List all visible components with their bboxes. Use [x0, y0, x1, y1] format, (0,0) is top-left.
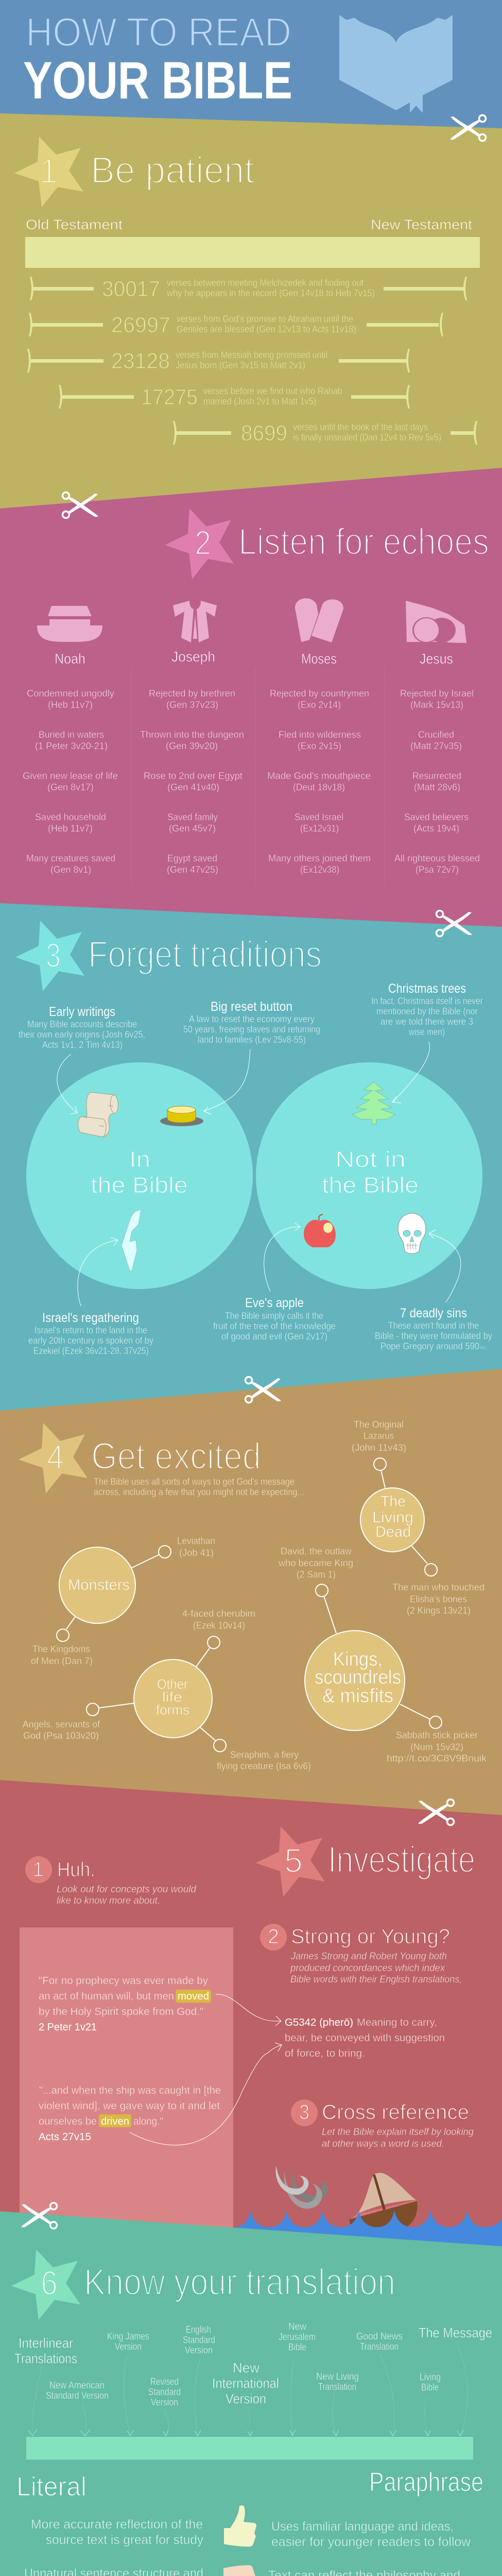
text: paraphrase pro — [271, 2519, 471, 2549]
translation labels: Standard Version — [46, 2391, 109, 2401]
bubble: kings, scoundrels and misfits: & misfits — [322, 1685, 393, 1707]
step 2: strong or young — [260, 1924, 462, 1985]
quote: acts: along." — [133, 2116, 163, 2127]
step 2: strong or young: produced concordances which index — [290, 1963, 445, 1974]
span: 26997 verses: Gentiles are blessed (Gen 12v13 to Acts 11v18) — [177, 324, 356, 334]
text: israel's regathering: early 20th century is spoken of by — [28, 1335, 153, 1346]
step 1: huh: like to know more about. — [57, 1895, 160, 1906]
text: literal pro — [31, 2517, 203, 2547]
column: Joseph: (Gen 37v23) — [166, 700, 218, 710]
arrow: christmas text to tree — [392, 1042, 430, 1103]
column: Moses: (Exo 2v15) — [298, 741, 341, 751]
icon: open book — [339, 15, 453, 113]
column: Joseph: (Gen 41v40) — [167, 782, 219, 792]
star number 6: 6 — [41, 2264, 58, 2302]
span: 30017 verses: verses between meeting Melchizedek and finding out — [167, 278, 363, 288]
label: literal: Literal — [16, 2472, 86, 2502]
span: 8699 verses — [173, 421, 477, 446]
bible bar — [25, 237, 480, 268]
span: 23128 verses: Jesus born (Gen 3v15 to Matt 2v1) — [176, 360, 305, 370]
column: Moses: Many others joined them — [268, 853, 371, 863]
translation labels: Version — [151, 2397, 178, 2408]
label: david — [278, 1546, 353, 1580]
span: 30017 verses: why he appears in the record (Gen 14v18 to Heb 7v15) — [166, 288, 375, 298]
column names: Jesus — [420, 651, 453, 667]
intro text: The Bible uses all sorts of ways to get God's message — [94, 1477, 295, 1487]
column: Moses: Saved Israel — [295, 812, 343, 822]
label: elisha's bones: Elisha's bones — [410, 1594, 467, 1604]
column: Jesus: (Psa 72v7) — [416, 865, 459, 875]
step 1: huh: Huh. — [57, 1858, 95, 1881]
quote: 2 peter: an act of human will, but men — [39, 1991, 174, 2002]
testament labels: Old Testament — [26, 217, 123, 232]
translation labels: Translations — [14, 2351, 77, 2366]
column: Noah: Given new lease of life — [23, 771, 118, 781]
span: 17275 verses: married (Josh 2v1 to Matt 1v5) — [203, 396, 316, 406]
column names — [55, 649, 453, 667]
arrow: driven to definition — [130, 2043, 282, 2145]
bubble: other life forms: life — [162, 1689, 182, 1705]
label: seraphim — [217, 1750, 311, 1771]
scissors divider — [437, 911, 472, 937]
text: israel's regathering: Israel's return to the land in the — [34, 1325, 147, 1335]
text: early writings — [19, 1005, 145, 1050]
translation labels: Translation — [360, 2342, 399, 2352]
label: the kingdoms of men: of Men (Dan 7) — [31, 1656, 93, 1666]
bubble: other life forms: forms — [156, 1702, 189, 1718]
text: 7 deadly sins: 7 deadly sins — [400, 1306, 467, 1320]
quote: acts: ourselves be — [39, 2116, 97, 2127]
icon: ark — [37, 606, 102, 642]
bubble: kings, scoundrels and misfits — [305, 1584, 442, 1731]
label: leviathan — [177, 1536, 215, 1558]
column: Noah: (Heb 11v7) — [48, 823, 93, 834]
step 3: cross reference: Cross reference — [322, 2101, 469, 2124]
column: Joseph: (Gen 39v20) — [166, 741, 218, 751]
text: christmas trees: Christmas trees — [388, 981, 466, 996]
star number 3: 3 — [46, 936, 61, 974]
column: Moses: (Exo 2v14) — [298, 700, 341, 710]
text: christmas trees: In fact, Christmas itself is never — [371, 996, 483, 1006]
translation labels: New Living — [316, 2371, 359, 2382]
span: 17275 verses — [59, 385, 410, 410]
intro text — [94, 1477, 304, 1497]
translation labels: English — [186, 2325, 211, 2335]
text: christmas trees: wise men) — [408, 1027, 445, 1037]
column: Joseph: Rose to 2nd over Egypt — [144, 771, 243, 781]
span: 23128 verses: verses from Messiah being promised until — [176, 350, 327, 360]
panel: 1 be patient — [0, 113, 502, 510]
translation labels: Translation — [318, 2382, 356, 2393]
step 1: huh: Look out for concepts you would — [57, 1884, 197, 1895]
star number 1: 1 — [39, 152, 58, 190]
label: cherubim: 4-faced cherubim — [182, 1608, 255, 1619]
arrow: early writings to scroll — [57, 1054, 77, 1114]
text: eve's apple — [213, 1296, 336, 1342]
label: elisha's bones: (2 Kings 13v21) — [407, 1605, 471, 1616]
text: eve's apple: fruit of the tree of the knowledge — [213, 1321, 336, 1331]
text: early writings: Many Bible accounts describe — [27, 1019, 137, 1029]
step 1: huh — [25, 1856, 197, 1906]
text: 7 deadly sins: Bible - they were formulated by — [375, 1331, 492, 1341]
panel: header — [0, 0, 502, 131]
quote: 2 peter — [39, 1975, 211, 2033]
column: Jesus — [394, 688, 480, 875]
column: Joseph: Rejected by brethren — [149, 688, 235, 699]
label: the original lazarus: (John 11v43) — [352, 1443, 406, 1453]
scissors divider — [245, 1377, 281, 1402]
column: Joseph: (Gen 45v7) — [169, 823, 216, 834]
translation labels: International — [212, 2376, 279, 2391]
label: cherubim: (Ezek 10v14) — [193, 1620, 245, 1631]
column: Noah — [23, 688, 118, 875]
icon: coat — [173, 601, 217, 642]
column: Jesus: All righteous blessed — [394, 853, 480, 863]
text: paraphrase pro: easier for younger readers to follow — [271, 2535, 471, 2549]
column: Moses: (Deut 18v18) — [293, 782, 345, 792]
translation labels: The Message — [419, 2325, 492, 2341]
label: angels — [23, 1719, 100, 1741]
translation labels: King James — [107, 2331, 149, 2342]
bubble: the living dead: Dead — [375, 1523, 411, 1540]
translation labels: Bible — [421, 2382, 439, 2393]
text: christmas trees — [371, 981, 483, 1037]
panel: 5 investigate — [0, 1780, 502, 2251]
label: sabbath stick picker: Sabbath stick picker — [396, 1730, 478, 1740]
scissors divider — [22, 2203, 57, 2229]
icon: reset button — [160, 1106, 203, 1126]
label: cherubim — [182, 1608, 255, 1631]
translation labels: Bible — [288, 2342, 306, 2353]
icon: apple — [304, 1214, 336, 1247]
translation labels: Version — [185, 2345, 213, 2356]
label: sabbath stick picker: http://t.co/3C8V9Bnuik — [387, 1753, 487, 1764]
step 2: strong or young: Strong or Young? — [291, 1925, 450, 1948]
scissors divider — [419, 1799, 454, 1825]
text: early writings: their own early origins (Josh 6v25, — [19, 1029, 145, 1040]
span: 30017 verses: 30017 — [102, 277, 160, 301]
text: big reset button: 50 years, freeing slaves and returning — [183, 1024, 320, 1035]
text: eve's apple: Eve's apple — [245, 1296, 304, 1310]
bubble: the living dead: The — [380, 1493, 406, 1510]
text: eve's apple: of good and evil (Gen 2v17) — [221, 1331, 327, 1342]
text: literal pro: source text is great for study — [46, 2533, 203, 2547]
star number 2: 2 — [195, 523, 211, 562]
scissors divider — [63, 493, 98, 518]
translation labels: Standard — [148, 2387, 181, 2398]
title: YOUR BIBLE — [23, 51, 292, 110]
circle: not in the bible — [256, 1062, 482, 1289]
label: elisha's bones — [392, 1582, 484, 1616]
definition: g5342 — [285, 2017, 445, 2059]
column: Noah: Saved household — [35, 812, 106, 822]
label: the original lazarus: Lazarus — [363, 1431, 394, 1441]
span: 8699 verses: is finally unsealed (Dan 12v4 to Rev 5v5) — [293, 432, 441, 443]
icon: boat — [349, 2173, 418, 2231]
translation labels: New American — [49, 2380, 105, 2391]
arrow: sins text to skull — [429, 1230, 461, 1302]
panel: bible quotes — [20, 1927, 233, 2231]
quote: acts — [39, 2085, 221, 2143]
heading: investigate: Investigate — [328, 1839, 475, 1880]
arrow: reset text to button — [204, 1049, 250, 1114]
text: 7 deadly sins: These aren't found in the — [388, 1320, 479, 1331]
step 3: cross reference: at other ways a word is used. — [322, 2139, 444, 2149]
translation labels: Standard — [183, 2335, 215, 2346]
bubble: monsters: Monsters — [68, 1577, 130, 1594]
quote: 2 peter: 2 Peter 1v21 — [39, 2022, 97, 2033]
text: israel's regathering: Ezekiel (Ezek 36v21-28, 37v25) — [33, 1346, 149, 1356]
column: Jesus: Saved believers — [404, 812, 469, 822]
text: big reset button: Big reset button — [211, 999, 292, 1014]
span: 26997 verses: 26997 — [111, 313, 170, 337]
label: the kingdoms of men — [31, 1644, 93, 1666]
star number 4: 4 — [47, 1438, 64, 1476]
label: david: (2 Sam 1) — [297, 1569, 336, 1580]
waves — [234, 2210, 502, 2251]
column: Moses: Fled into wilderness — [279, 730, 361, 740]
bubble: other life forms: Other — [157, 1676, 188, 1692]
column names: Noah — [55, 651, 85, 667]
step 3: cross reference: 3 — [299, 2101, 309, 2124]
column: Noah: (Gen 8v1) — [50, 865, 91, 875]
quote: 2 peter: moved — [178, 1991, 209, 2002]
span: 23128 verses — [27, 349, 410, 374]
translation labels: Jerusalem — [279, 2332, 316, 2343]
translation labels — [14, 2321, 492, 2408]
column: Moses: (Ex12v38) — [300, 865, 339, 875]
text: paraphrase pro: Uses familiar language and ideas, — [271, 2519, 454, 2534]
text: early writings: Early writings — [49, 1005, 115, 1019]
column: Jesus: (Matt 28v6) — [414, 782, 460, 792]
column: Jesus: (Matt 27v35) — [410, 741, 462, 751]
quote: acts: violent wind], we gave way to it and let — [39, 2100, 220, 2112]
span: 26997 verses: verses from God's promise to Abraham until the — [177, 314, 353, 324]
step 3: cross reference — [291, 2099, 474, 2149]
translation labels: New — [288, 2321, 306, 2332]
intro text: across, including a few that you might not be expecting... — [94, 1487, 304, 1497]
text: israel's regathering: Israel's regathering — [42, 1311, 139, 1325]
icon: map of israel — [122, 1209, 141, 1271]
text: big reset button: A law to reset the economy every — [189, 1014, 315, 1024]
quote: 2 peter: by the Holy Spirit spoke from God." — [39, 2006, 203, 2018]
dotted arrows to spectrum bar — [28, 2344, 468, 2436]
translation labels: Revised — [150, 2377, 179, 2387]
title — [23, 9, 292, 110]
label: in the bible — [91, 1147, 188, 1198]
label: the original lazarus — [352, 1419, 406, 1453]
column: Joseph: (Gen 47v25) — [167, 865, 218, 875]
text: early writings: Acts 1v1, 2 Tim 4v13) — [42, 1040, 123, 1050]
label: seraphim: Seraphim, a fiery — [230, 1750, 299, 1760]
title: HOW TO READ — [26, 9, 291, 55]
label: sabbath stick picker: (Num 15v32) — [410, 1742, 463, 1752]
span: 23128 verses: 23128 — [111, 349, 170, 374]
column: Joseph: Thrown into the dungeon — [140, 730, 244, 740]
column: Jesus: Crucified — [418, 730, 454, 740]
text: israel's regathering — [28, 1311, 153, 1356]
column: Noah: Condemned ungodly — [27, 688, 114, 699]
star number 1 — [14, 137, 83, 207]
panel: 4 get excited — [0, 1369, 502, 1817]
column: Moses: Rejected by countrymen — [270, 688, 369, 699]
icon: scroll — [78, 1092, 118, 1137]
text: 7 deadly sins: AD — [480, 1345, 486, 1351]
column: Noah: (Heb 11v7) — [48, 700, 93, 710]
definition: g5342: bear, be conveyed with suggestion — [285, 2032, 445, 2044]
column names: Joseph — [171, 649, 215, 665]
bubble: kings, scoundrels and misfits: Kings, — [333, 1649, 383, 1670]
star number 2 — [165, 509, 234, 579]
star number 5 — [256, 1826, 325, 1897]
icon: christmas tree — [352, 1082, 395, 1124]
label: seraphim: flying creature (Isa 6v6) — [217, 1761, 311, 1771]
span: 17275 verses: 17275 — [141, 385, 198, 410]
span: 26997 verses — [29, 313, 443, 337]
label: not in the bible: Not in — [335, 1147, 406, 1172]
definition: g5342: G5342 (pherō) — [285, 2017, 353, 2028]
label: david: who became King — [278, 1558, 353, 1568]
label: leviathan: Leviathan — [177, 1536, 215, 1546]
bubble: monsters — [57, 1546, 171, 1641]
panel: 2 listen for echoes — [0, 468, 502, 928]
column: Jesus: Rejected by Israel — [400, 688, 474, 699]
column: Jesus: (Mark 15v13) — [410, 700, 463, 710]
span: 17275 verses: verses before we find out who Rahab — [203, 386, 342, 396]
column: Moses: (Ex12v31) — [300, 823, 339, 834]
heading: know your translation: Know your translation — [84, 2262, 395, 2303]
label: elisha's bones: The man who touched — [392, 1582, 484, 1592]
arrow: israel text to map — [78, 1238, 118, 1306]
text: 7 deadly sins: Pope Gregory around 590 — [380, 1341, 479, 1351]
column: Noah: (Gen 8v17) — [47, 782, 94, 792]
text: literal pro: More accurate reflection of the — [31, 2517, 203, 2532]
column: Jesus: (Acts 19v4) — [413, 823, 459, 834]
label: not in the bible: the Bible — [322, 1173, 419, 1198]
column: Moses — [267, 688, 371, 875]
bubble: the living dead — [360, 1458, 437, 1576]
quote: 2 peter: "For no prophecy was ever made by — [39, 1975, 208, 1987]
translation labels: Good News — [356, 2331, 403, 2342]
label: in the bible: the Bible — [91, 1173, 188, 1198]
panel: 3 forget traditions — [0, 903, 502, 1412]
icon: empty tomb — [406, 601, 466, 645]
column: Noah: Buried in waters — [39, 730, 104, 740]
bubble: the living dead: Living — [372, 1509, 413, 1526]
label: sabbath stick picker — [387, 1730, 487, 1764]
column: Jesus: Resurrected — [412, 771, 461, 781]
column names: Moses — [301, 651, 337, 667]
step 2: strong or young: 2 — [268, 1925, 279, 1948]
label: angels: God (Psa 103v20) — [23, 1731, 99, 1741]
text: christmas trees: mentioned by the Bible (nor — [376, 1006, 478, 1016]
label: not in the bible — [322, 1147, 419, 1198]
column: Moses: Made God's mouthpiece — [267, 771, 371, 781]
translation labels: Version — [115, 2342, 142, 2352]
testament labels — [26, 217, 473, 232]
translation labels: Living — [420, 2372, 441, 2383]
label: leviathan: (Job 41) — [179, 1548, 214, 1558]
star number 4 — [19, 1423, 88, 1494]
text: 7 deadly sins — [375, 1306, 492, 1351]
span: 8699 verses: 8699 — [241, 421, 287, 446]
spectrum bar — [26, 2437, 473, 2460]
bubble: other life forms — [86, 1636, 226, 1752]
column: Noah: (1 Peter 3v20-21) — [35, 741, 108, 751]
testament labels: New Testament — [371, 217, 473, 232]
column: Noah: Many creatures saved — [26, 853, 115, 863]
label: in the bible: In — [129, 1147, 150, 1172]
star number 6 — [11, 2249, 80, 2320]
heading: get excited: Get excited — [91, 1436, 261, 1477]
translation labels: Interlinear — [19, 2335, 73, 2351]
span: 30017 verses — [30, 277, 467, 301]
star number 5: 5 — [284, 1841, 303, 1879]
text: big reset button: land to families (Lev 25v8-55) — [198, 1035, 306, 1045]
column: Joseph — [140, 688, 244, 875]
column: Joseph: Egypt saved — [167, 853, 217, 863]
step 2: strong or young: James Strong and Robert Young both — [290, 1951, 447, 1962]
star number 3 — [15, 921, 84, 991]
text: big reset button — [183, 999, 320, 1045]
step 1: huh: 1 — [32, 1858, 44, 1881]
label: the original lazarus: The Original — [354, 1419, 404, 1430]
span: 8699 verses: verses until the book of the last days — [293, 422, 428, 432]
heading: be patient: Be patient — [91, 150, 254, 191]
text: christmas trees: are we told there were 3 — [380, 1016, 473, 1027]
quote: acts: Acts 27v15 — [39, 2131, 91, 2143]
text: eve's apple: The Bible simply calls it the — [225, 1311, 323, 1321]
step 3: cross reference: Let the Bible explain itself by looking — [322, 2127, 474, 2138]
column: Joseph: Saved family — [167, 812, 218, 822]
label: david: David, the outlaw — [281, 1546, 352, 1556]
definition: g5342: of force, to bring. — [285, 2048, 365, 2059]
icon: skull — [398, 1213, 426, 1253]
translation labels: New — [233, 2360, 259, 2376]
icon: thumbs down — [223, 2565, 255, 2576]
bubble: kings, scoundrels and misfits: scoundrels — [315, 1667, 401, 1688]
quote: acts: driven — [101, 2116, 129, 2127]
translation labels: Version — [226, 2391, 266, 2406]
arrow: eve text to apple — [264, 1223, 300, 1292]
icon: wind — [275, 2165, 327, 2209]
circle: in the bible — [26, 1062, 253, 1289]
heading: forget traditions: Forget traditions — [88, 934, 322, 975]
step 2: strong or young: Bible words with their English translations, — [290, 1974, 462, 1985]
quote: acts: "...and when the ship was caught in [the — [39, 2085, 221, 2096]
arrow: moved to definition — [216, 1994, 281, 2026]
label: the kingdoms of men: The Kingdoms — [32, 1644, 90, 1654]
label: angels: Angels, servants of — [23, 1719, 100, 1730]
panel: 6 know your translation — [0, 2203, 502, 2576]
icon: thumbs up — [224, 2505, 256, 2547]
icon: stone tablets — [295, 598, 343, 642]
definition: g5342: Meaning to carry, — [357, 2017, 437, 2028]
scissors divider — [451, 115, 486, 141]
